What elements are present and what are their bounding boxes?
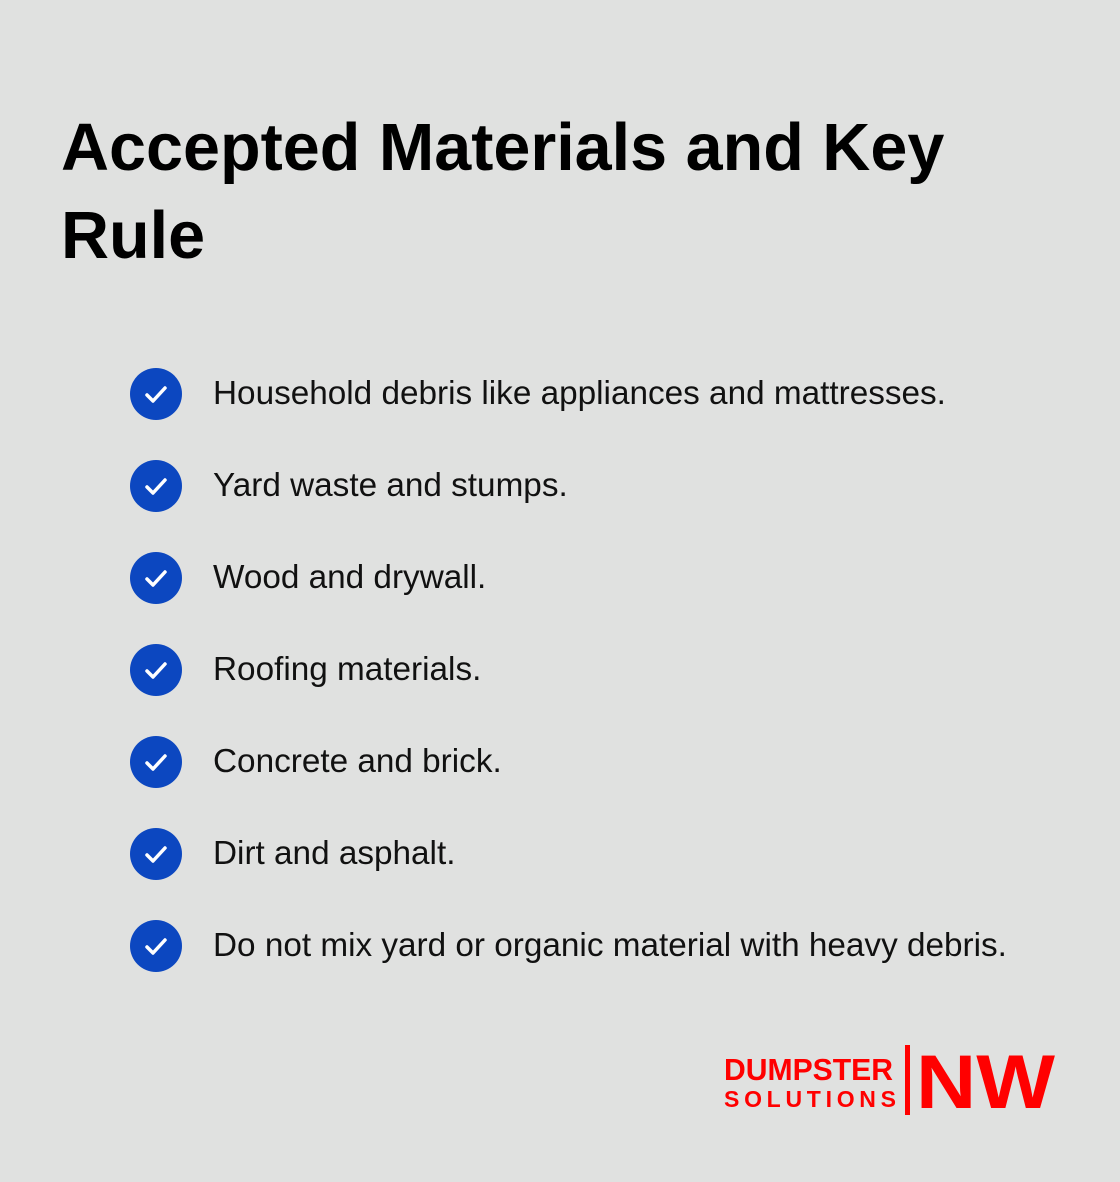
list item 6: Dirt and asphalt. xyxy=(213,835,455,872)
list item 4 xyxy=(130,644,481,696)
list item 7: Do not mix yard or organic material with heavy debris. xyxy=(213,927,1007,964)
list item 5: Concrete and brick. xyxy=(213,743,502,780)
logo: SOLUTIONS xyxy=(724,1086,896,1112)
list item 1 xyxy=(130,368,946,420)
title: Accepted Materials and Key Rule xyxy=(61,111,944,273)
list item 2 xyxy=(130,460,568,512)
list item 7 xyxy=(130,920,1007,972)
list item 4: Roofing materials. xyxy=(213,651,481,688)
list item 6 xyxy=(130,828,455,880)
list item 3: Wood and drywall. xyxy=(213,559,486,596)
logo: DUMPSTER xyxy=(724,1052,893,1087)
logo xyxy=(724,1044,1055,1116)
list item 5 xyxy=(130,736,502,788)
list item 2: Yard waste and stumps. xyxy=(213,467,568,504)
list item 3 xyxy=(130,552,486,604)
list item 1: Household debris like appliances and mattresses. xyxy=(213,375,946,412)
